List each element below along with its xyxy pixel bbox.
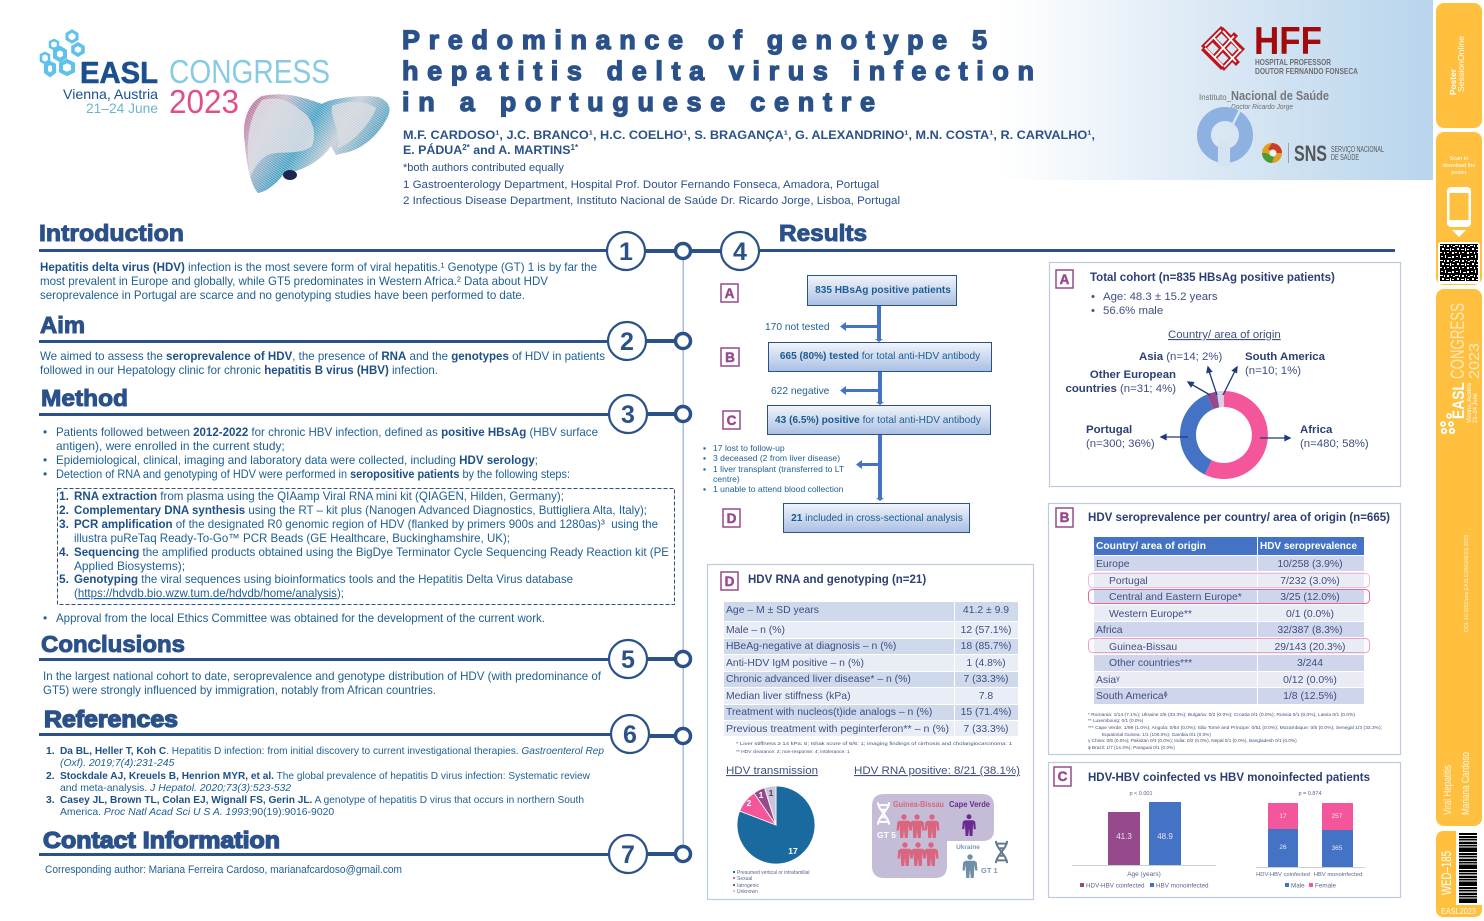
HDV RNA positive genotype map: Ukraine — [956, 844, 980, 851]
section: introduction: Introduction — [39, 220, 184, 246]
table of characteristics: Male – n (%) — [726, 625, 785, 636]
EASL Congress logo: EASL — [80, 55, 158, 90]
sidebar: QR tab: poster — [1451, 170, 1467, 176]
flow box 21 — [784, 504, 970, 532]
section: results heading — [690, 220, 1395, 270]
flow box 21: 21 included in cross-sectional analysis — [791, 513, 963, 524]
table footnotes: * Romania: 1/14 (7.1%); Ukraine 2/6 (33.3%); Bulgaria: 0/2 (0.0%); Croatia 0/1 (0.0%); Russia 0/1 (0.0%), Latvia 0/1 (0.0%) — [1088, 712, 1355, 717]
flow box 835 — [808, 276, 956, 306]
EASL Congress logo: CONGRESS — [169, 53, 330, 90]
seroprevalence table: 3/244 — [1297, 658, 1323, 669]
donut chart — [1188, 399, 1260, 471]
badge A: A — [1060, 272, 1070, 287]
flow box 43 — [768, 406, 990, 434]
seroprevalence table: HDV seroprevalence — [1260, 541, 1357, 552]
header band — [0, 0, 1433, 180]
authors and affiliations — [403, 128, 1095, 207]
seroprevalence table: South Americaᶲ — [1096, 691, 1168, 702]
section: aim — [39, 312, 690, 377]
seroprevalence table: 32/387 (8.3%) — [1277, 625, 1343, 636]
table of characteristics: 12 (57.1%) — [961, 625, 1011, 636]
table of characteristics: 7 (33.3%) — [963, 674, 1009, 685]
table footnotes — [1088, 712, 1382, 750]
flow excluded labels: 1 liver transplant (transferred to LT — [713, 464, 845, 474]
badge D: D — [725, 574, 735, 589]
donut labels: countries (n=31; 4%) — [1066, 383, 1176, 395]
donut labels: South America — [1245, 351, 1326, 363]
EASL Congress logo: Vienna, Austria — [63, 86, 158, 102]
aim text: followed in our Hepatology clinic for chronic hepatitis B virus (HBV) infection. — [40, 363, 438, 377]
donut labels: (n=300; 36%) — [1086, 438, 1155, 450]
method steps dashed box — [58, 488, 674, 604]
HDV transmission pie chart: 17 — [788, 846, 798, 856]
flow excluded labels: 3 deceased (2 from liver disease) — [713, 453, 840, 463]
HDV RNA positive genotype map: HDV RNA positive: 8/21 (38.1%) — [854, 765, 1020, 777]
section: results heading: Results — [779, 220, 867, 246]
seroprevalence table: Portugal — [1109, 576, 1148, 587]
panel D title: HDV RNA and genotyping (n=21) — [748, 574, 926, 586]
EASL Congress logo: 21–24 June — [86, 100, 158, 116]
seroprevalence table: Europe — [1096, 559, 1130, 570]
sidebar: poster session online tab: Poster — [1448, 68, 1458, 95]
HDV RNA positive genotype map: GT 5 — [877, 830, 896, 840]
sidebar: poster number tab: EASL2023 — [1441, 906, 1476, 916]
HDV transmission pie chart: HDV transmission — [726, 765, 818, 777]
congress vertical logo: Vienna, Austria — [1467, 382, 1473, 423]
table of characteristics: Age – M ± SD years — [726, 605, 819, 616]
flow excluded labels — [703, 322, 845, 494]
icon: down triangle — [1452, 230, 1466, 237]
sex stacked bar chart: 365 — [1332, 845, 1343, 852]
sidebar: poster session online tab — [1436, 3, 1482, 128]
section: introduction — [39, 220, 690, 302]
title: Predominance of genotype 5 — [402, 25, 987, 55]
HDV RNA positive genotype map: GT 1 — [981, 866, 998, 875]
table of characteristics: 1 (4.8%) — [966, 658, 1006, 669]
sex stacked bar chart: Female — [1315, 882, 1336, 890]
method bullets — [43, 425, 598, 625]
flow excluded labels: 17 lost to follow-up — [713, 443, 785, 453]
introduction text: Hepatitis delta virus (HDV) infection is the most severe form of viral hepatitis.¹ Genotype (GT) 1 is by far the — [40, 260, 597, 274]
sex stacked bar chart: Male — [1291, 882, 1305, 890]
table of characteristics: Previous treatment with peginterferon** – n (%) — [726, 724, 949, 735]
flow badge C — [723, 411, 740, 429]
table of characteristics: 15 (71.4%) — [961, 707, 1011, 718]
pie legend — [733, 870, 810, 895]
flow excluded labels: ▪ — [703, 453, 706, 463]
seroprevalence table: Country/ area of origin — [1096, 541, 1206, 552]
flow badge A: A — [725, 286, 735, 301]
panel B: HDV seroprevalence — [1048, 504, 1400, 754]
flow box 665: 665 (80%) tested for total anti-HDV antibody — [780, 351, 981, 362]
section: conclusions — [39, 631, 690, 697]
cohort bullets: 56.6% male — [1103, 305, 1163, 317]
congress vertical logo — [1441, 303, 1483, 433]
table footnotes: γ China: 0/5 (0.0%); Pakistan 0/3 (0.0%); India: 0/2 (0.0%), Nepal 0/1 (0.0%), Bangladesh 0/1 (0.0%) — [1088, 738, 1297, 743]
reference list: 3. — [46, 795, 55, 806]
donut labels: Asia (n=14; 2%) — [1139, 351, 1222, 363]
seroprevalence table: 29/143 (20.3%) — [1274, 642, 1346, 653]
age bar chart: Age (years) — [1127, 871, 1161, 878]
congress vertical logo: 21–24 June — [1473, 392, 1479, 423]
age bar chart: HBV monoinfected — [1156, 882, 1209, 890]
pie legend: Iatrogenic — [737, 883, 759, 889]
section number 1: 1 — [619, 238, 633, 266]
title — [402, 25, 1034, 117]
logo: HFF hospital: DOUTOR FERNANDO FONSECA — [1255, 66, 1358, 76]
method bullets: • — [43, 425, 47, 439]
sidebar: congress and session tab — [1436, 289, 1483, 826]
panel C title: HDV-HBV coinfected vs HBV monoinfected patients — [1088, 770, 1370, 784]
liver illustration — [244, 94, 390, 193]
badge B — [1056, 508, 1073, 527]
section number 5: 5 — [621, 646, 635, 674]
HDV transmission pie chart: 1 — [769, 788, 774, 798]
seroprevalence table: Guinea-Bissau — [1109, 642, 1177, 653]
age bar chart: 41.3 — [1116, 832, 1132, 841]
panel C: coinfected vs monoinfected — [1048, 762, 1400, 898]
pie legend: Unknown — [737, 889, 758, 895]
method steps dashed box: 3. — [59, 517, 69, 531]
table footnotes — [736, 741, 1012, 755]
QR code — [1438, 242, 1480, 284]
flow excluded labels: 622 negative — [771, 386, 830, 397]
introduction text — [40, 260, 597, 302]
flow badge B — [721, 348, 739, 366]
section number 2 — [608, 322, 690, 360]
HDV transmission pie chart — [726, 765, 818, 895]
logo: Instituto Nacional de Saude: Doctor Ricardo Jorge — [1231, 102, 1293, 111]
seroprevalence table: Asiaᵞ — [1096, 675, 1120, 686]
title: in a portuguese centre — [402, 87, 875, 117]
method bullets: • — [43, 467, 47, 481]
aim text — [40, 349, 605, 377]
logo: Instituto Nacional de Saude: Instituto_ — [1199, 93, 1232, 102]
aim text: We aimed to assess the seroprevalence of HDV, the presence of RNA and the genotypes of HDV in patients — [40, 349, 605, 363]
section number 6 — [611, 715, 690, 753]
introduction text: most prevalent in Europe and globally, while GT5 predominates in Western Africa.² Data about HDV — [40, 274, 548, 288]
sex stacked bar chart: 26 — [1279, 844, 1287, 851]
section: aim: Aim — [40, 312, 85, 338]
donut labels: Portugal — [1086, 424, 1132, 436]
method steps dashed box: 5. — [59, 572, 69, 586]
table footnotes: Equatorial Guinea: 1/1 (100.0%); Gambia 0/1 (0.0%) — [1102, 732, 1211, 737]
method bullets: • — [43, 611, 47, 625]
cohort bullets: • — [1091, 305, 1095, 317]
contact text: Corresponding author: Mariana Ferreira Cardoso, marianafcardoso@gmail.com — [45, 864, 402, 876]
session topic: Viral Hepatitis — [1442, 765, 1454, 815]
section number 3 — [609, 395, 690, 433]
method bullets: • — [43, 453, 47, 467]
seroprevalence table: Central and Eastern Europe* — [1109, 592, 1242, 603]
sidebar: QR tab: download the — [1443, 163, 1475, 169]
table of characteristics: HBeAg-negative at diagnosis – n (%) — [726, 641, 896, 652]
panel D: HDV RNA and genotyping — [708, 564, 1034, 900]
flow badge A — [721, 284, 738, 302]
congress vertical logo: CONGRESS — [1448, 303, 1469, 379]
section number 5 — [609, 640, 690, 678]
flow excluded labels: 1 unable to attend blood collection — [713, 484, 844, 494]
flow excluded labels: 170 not tested — [765, 322, 830, 333]
title: hepatitis delta virus infection — [402, 56, 1034, 86]
flow badge D: D — [727, 511, 737, 526]
timeline spine — [682, 251, 684, 854]
table of characteristics: 18 (85.7%) — [961, 641, 1011, 652]
badge B: B — [1060, 510, 1070, 525]
flow badge D — [723, 509, 740, 527]
table of characteristics: 7 (33.3%) — [963, 724, 1009, 735]
sex stacked bar chart: p = 0.874 — [1298, 791, 1322, 797]
reference list: 2. — [46, 771, 55, 782]
HDV RNA positive genotype map: Cape Verde — [949, 800, 991, 809]
seroprevalence table: Other countries*** — [1109, 658, 1192, 669]
flow excluded labels: ▪ — [703, 464, 706, 474]
age bar chart: p < 0.001 — [1129, 791, 1153, 797]
badge C — [1054, 767, 1071, 786]
table of characteristics: 41.2 ± 9.9 — [963, 605, 1009, 616]
logo: SNS: DE SAÚDE — [1331, 153, 1359, 162]
table of characteristics — [724, 602, 1018, 736]
section: references: References — [44, 706, 178, 732]
DOI text: DOI: 10.3252/pos.EASLCONGRESS.2023 — [1464, 535, 1470, 632]
logo: HFF hospital: HOSPITAL PROFESSOR — [1255, 57, 1331, 67]
sex stacked bar chart: 17 — [1279, 813, 1287, 820]
sex stacked bar chart: HBV monoinfected — [1314, 872, 1362, 878]
method steps dashed box: (https://hdvdb.bio.wzw.tum.de/hdvdb/home/analysis); — [74, 586, 344, 600]
HDV RNA positive genotype map — [854, 765, 1020, 878]
barcode — [1459, 833, 1477, 903]
seroprevalence table: 1/8 (12.5%) — [1283, 691, 1337, 702]
logo: Instituto Nacional de Saude — [1199, 89, 1329, 166]
method bullets: antigen), were enrolled in the current study; — [56, 439, 285, 453]
donut labels: Other European — [1090, 369, 1176, 381]
section: conclusions: Conclusions — [41, 631, 185, 657]
reference list: Casey JL, Brown TL, Colan EJ, Wignall FS, Gerin JL. A genotype of hepatitis D virus that occurs in northern South — [60, 795, 584, 806]
authors and affiliations: 1* — [571, 143, 579, 152]
icon: phone — [1447, 187, 1471, 227]
table of characteristics: 7.8 — [979, 691, 993, 702]
section number 3: 3 — [621, 401, 635, 429]
flow arrows — [840, 306, 884, 501]
congress vertical logo: 2023 — [1466, 343, 1483, 379]
table footnotes: *** Cape Verde: 1/99 (1.0%); Angola: 0/84 (0.0%); São Tomé and Príncipe: 0/51 (0.0%); Mozambique: 0/5 (0.0%); Senegal 1/3 (33.3%); — [1088, 725, 1382, 730]
reference list: Da BL, Heller T, Koh C. Hepatitis D infection: from initial discovery to current investigational therapies. Gastroenterol Rep — [60, 746, 604, 757]
sex stacked bar chart: HDV-HBV coinfected — [1256, 872, 1310, 878]
method bullets: Approval from the local Ethics Committee was obtained for the development of the current work. — [56, 611, 545, 625]
table footnotes: ** Luxembourg: 0/1 (0.0%) — [1088, 718, 1144, 723]
reference list: America. Proc Natl Acad Sci U S A. 1993;90(19):9016-9020 — [60, 807, 334, 818]
section: references — [39, 706, 690, 818]
sex stacked bar chart — [1256, 791, 1365, 890]
authors and affiliations: E. PÁDUA — [403, 143, 462, 157]
table of characteristics: Anti-HDV IgM positive – n (%) — [726, 658, 864, 669]
seroprevalence table — [1094, 537, 1364, 704]
section: contact information: Contact Information — [43, 827, 280, 853]
method steps dashed box: 1. — [59, 489, 69, 503]
donut labels: Africa — [1300, 424, 1333, 436]
seroprevalence table: 0/1 (0.0%) — [1286, 609, 1334, 620]
badge C: C — [1058, 769, 1068, 784]
authors and affiliations: 2* — [462, 143, 471, 152]
sidebar: poster session online tab: SessionOnline — [1457, 35, 1466, 92]
flow excluded labels: ▪ — [703, 484, 706, 494]
section: contact information — [39, 827, 690, 876]
flow excluded labels: centre) — [713, 474, 740, 484]
seroprevalence table: Western Europe** — [1109, 609, 1192, 620]
HDV transmission pie chart: 1 — [759, 790, 764, 800]
sidebar: QR tab — [1436, 132, 1482, 285]
donut labels: (n=480; 58%) — [1300, 438, 1369, 450]
table of characteristics: Chronic advanced liver disease* – n (%) — [726, 674, 911, 685]
seroprevalence table: 3/25 (12.0%) — [1280, 592, 1340, 603]
method steps dashed box: PCR amplification of the designated R0 genomic region of HDV (flanked by primers 900s and 1280as)³ using the — [74, 517, 658, 531]
logo: SNS: SNS — [1294, 141, 1327, 166]
donut labels — [1066, 351, 1369, 450]
logo: HFF hospital: HFF — [1254, 20, 1322, 63]
panel B title: HDV seroprevalence per country/ area of origin (n=665) — [1088, 512, 1390, 524]
table footnotes: ϕ Brazil: 1/7 (14.3%); Paraguai 0/1 (0.0%) — [1088, 745, 1175, 750]
seroprevalence table: Africa — [1096, 625, 1123, 636]
section number 7 — [609, 835, 690, 873]
section number 7: 7 — [621, 841, 635, 869]
EASL Congress logo: 2023 — [169, 83, 239, 120]
reference list: and meta-analysis. J Hepatol. 2020;73(3):523-532 — [60, 783, 291, 794]
seroprevalence table: 10/258 (3.9%) — [1277, 559, 1343, 570]
section number 1 — [607, 232, 690, 270]
pie legend: Sexual — [737, 876, 752, 882]
seroprevalence table: 7/232 (3.0%) — [1280, 576, 1340, 587]
donut labels: (n=10; 1%) — [1245, 365, 1301, 377]
donut callout arrows — [1161, 367, 1290, 440]
section number 4 — [690, 232, 759, 270]
logo: Instituto Nacional de Saude: Nacional de Saúde — [1231, 89, 1329, 103]
method steps dashed box: Genotyping the viral sequences using bioinformatics tools and the Hepatitis Delta Virus database — [74, 572, 573, 586]
flow badge B: B — [725, 350, 735, 365]
table footnotes: ** HDV clearance: 2; non-response: 4; intolerance: 1 — [736, 749, 850, 755]
age bar chart — [1072, 791, 1216, 890]
section: method: Method — [41, 385, 128, 411]
authors and affiliations: *both authors contributed equally — [403, 162, 564, 174]
method bullets: Detection of RNA and genotyping of HDV were performed in seropositive patients by the following steps: — [56, 467, 570, 481]
panel A: total cohort — [1050, 262, 1400, 486]
conclusions text: In the largest national cohort to date, seroprevalence and genotype distribution of HDV (with predominance of — [43, 669, 602, 683]
pie legend: Presumed vertical or intrafamilial — [737, 870, 810, 876]
congress vertical logo: EASL — [1449, 382, 1468, 419]
seroprevalence table: 0/12 (0.0%) — [1283, 675, 1337, 686]
logo: SNS — [1262, 141, 1384, 166]
section number 2: 2 — [620, 328, 634, 356]
sex stacked bar chart: 257 — [1332, 813, 1343, 820]
highlight outlines — [1088, 574, 1370, 652]
reference list — [46, 746, 604, 818]
HDV transmission pie chart: 2 — [747, 798, 752, 808]
section number 4: 4 — [733, 238, 747, 266]
conclusions text: GT5) were strongly influenced by immigration, notably from African countries. — [43, 683, 436, 697]
method steps dashed box: Sequencing the amplified products obtained using the BigDye Terminator Cycle Sequencing Ready Reaction kit (PE — [74, 545, 669, 559]
method steps dashed box: 4. — [59, 545, 69, 559]
flow box 43: 43 (6.5%) positive for total anti-HDV antibody — [775, 415, 982, 426]
table footnotes: * Liver stiffness ≥ 14 kPa: 5; Ishak score of 5/6: 1; imaging findings of cirrhosis and cholangiocarcinoma: 1 — [736, 741, 1012, 747]
section number 6: 6 — [623, 721, 637, 749]
method steps dashed box: Applied Biosystems); — [74, 559, 185, 573]
authors and affiliations: 2 Infectious Disease Department, Instituto Nacional de Saúde Dr. Ricardo Jorge, Lisboa, Portugal — [403, 195, 900, 207]
cohort bullets: Age: 48.3 ± 15.2 years — [1103, 291, 1218, 303]
method bullets: Patients followed between 2012-2022 for chronic HBV infection, defined as positive HBsAg (HBV surface — [56, 425, 598, 439]
EASL Congress logo — [41, 31, 330, 120]
cohort bullets: Country/ area of origin — [1168, 329, 1281, 341]
table of characteristics: Treatment with nucleos(t)ide analogs – n (%) — [726, 707, 932, 718]
section: method — [39, 385, 690, 625]
sidebar: QR tab: Scan to — [1450, 156, 1468, 162]
logo: HFF hospital — [1203, 20, 1358, 76]
flow box 835: 835 HBsAg positive patients — [815, 285, 951, 296]
method steps dashed box: Complementary DNA synthesis using the RT – kit plus (Nanogen Advanced Diagnostics, Buttigliera Alta, Italy); — [74, 503, 647, 517]
panel A title: Total cohort (n=835 HBsAg positive patients) — [1090, 272, 1335, 284]
presenter name: Mariana Cardoso — [1460, 752, 1472, 815]
reference list: 1. — [46, 746, 55, 757]
cohort bullets — [1091, 291, 1281, 341]
method steps dashed box: 2. — [59, 503, 69, 517]
flow excluded labels: ▪ — [703, 443, 706, 453]
introduction text: seroprevalence in Portugal are scarce and no genotyping studies have been performed to date. — [40, 288, 525, 302]
authors and affiliations: and A. MARTINS — [470, 143, 571, 157]
method steps dashed box: illustra puReTaq Ready-To-Go™ PCR Beads (GE Healthcare, Buckinghamshire, UK); — [74, 531, 510, 545]
cohort bullets: • — [1091, 291, 1095, 303]
flow box 665 — [768, 342, 992, 372]
HDV RNA positive genotype map: Guinea-Bissau — [893, 800, 944, 809]
age bar chart: 48.9 — [1157, 832, 1173, 841]
conclusions text — [43, 669, 602, 697]
authors and affiliations: 1 Gastroenterology Department, Hospital Prof. Doutor Fernando Fonseca, Amadora, Portugal — [403, 179, 879, 191]
age bar chart: HDV-HBV coinfected — [1086, 882, 1145, 890]
flow badge C: C — [727, 413, 737, 428]
method bullets: Epidemiological, clinical, imaging and laboratory data were collected, including HDV serology; — [56, 453, 538, 467]
logo: SNS: SERVIÇO NACIONAL — [1331, 145, 1384, 154]
reference list: (Oxf). 2019;7(4):231-245 — [60, 758, 175, 769]
flowchart — [703, 276, 992, 532]
reference list: Stockdale AJ, Kreuels B, Henrion MYR, et al. The global prevalence of hepatitis D virus infection: Systematic review — [60, 771, 590, 782]
sidebar: poster number tab: WED–185 — [1438, 851, 1454, 895]
badge D — [721, 572, 738, 590]
method steps dashed box: RNA extraction from plasma using the QIAamp Viral RNA mini kit (QIAGEN, Hilden, Germany); — [74, 489, 564, 503]
sidebar: poster number tab — [1436, 831, 1482, 917]
badge A — [1056, 270, 1073, 288]
authors and affiliations: M.F. CARDOSO¹, J.C. BRANCO¹, H.C. COELHO¹, S. BRAGANÇA¹, G. ALEXANDRINO¹, M.N. COSTA¹, R. CARVALHO¹, — [403, 128, 1095, 142]
table of characteristics: Median liver stiffness (kPa) — [726, 691, 851, 702]
